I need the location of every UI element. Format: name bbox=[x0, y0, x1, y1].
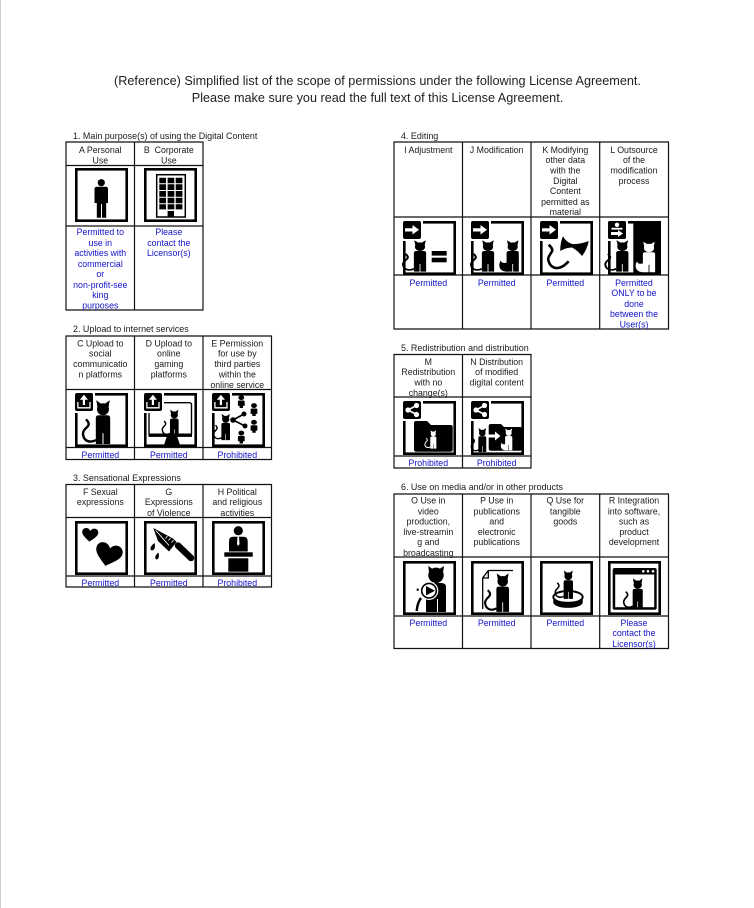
icon: modifying other data bbox=[540, 221, 592, 274]
column P label: and bbox=[489, 516, 504, 526]
column H label: activities bbox=[220, 508, 255, 518]
column D label: platforms bbox=[151, 370, 187, 380]
column H label: and religious bbox=[212, 497, 263, 507]
panel: 3. sensational expressions bbox=[66, 473, 272, 588]
column O label: live-streamin bbox=[403, 527, 453, 537]
column D label: D Upload to bbox=[146, 338, 192, 348]
status I: Permitted bbox=[409, 278, 447, 288]
column P label: electronic bbox=[478, 527, 516, 537]
icon: publications bbox=[472, 562, 523, 614]
status B: Licensor(s) bbox=[147, 248, 191, 258]
column O label: production, bbox=[407, 516, 450, 526]
column C label: social bbox=[89, 349, 112, 359]
column E label: third parties bbox=[214, 359, 261, 369]
icon: hearts bbox=[76, 522, 127, 574]
column O label: O Use in bbox=[411, 496, 446, 506]
status M: Prohibited bbox=[408, 458, 448, 468]
icon: use by third parties bbox=[212, 393, 264, 446]
column D label: gaming bbox=[154, 359, 183, 369]
column M label: M bbox=[425, 357, 432, 367]
icon: redistribution without change bbox=[403, 401, 455, 454]
column E label: within the bbox=[218, 370, 256, 380]
status R: Licensor(s) bbox=[612, 639, 656, 649]
icon: adjustment bbox=[403, 221, 455, 274]
heading: section 3: 3. Sensational Expressions bbox=[73, 473, 181, 483]
icon: software integration bbox=[609, 562, 660, 614]
icon: upload to social platforms bbox=[75, 393, 127, 446]
column R label: R Integration bbox=[609, 496, 659, 506]
column E label: for use by bbox=[218, 349, 257, 359]
column J label: J Modification bbox=[470, 145, 524, 155]
column N label: of modified bbox=[475, 367, 518, 377]
column K label: material bbox=[550, 207, 581, 217]
title: Please make sure you read the full text of this License Agreement. bbox=[192, 91, 563, 105]
status A: king bbox=[92, 290, 108, 300]
column G label: G bbox=[165, 487, 172, 497]
status E: Prohibited bbox=[217, 450, 257, 460]
icon: tangible goods bbox=[541, 562, 592, 614]
column N label: N Distribution bbox=[470, 357, 523, 367]
column R label: development bbox=[609, 537, 660, 547]
status A: purposes bbox=[82, 300, 119, 310]
status C: Permitted bbox=[81, 450, 119, 460]
column C label: n platforms bbox=[79, 370, 123, 380]
status A: activities with bbox=[74, 248, 126, 258]
table grid: section 6 bbox=[394, 494, 668, 648]
column K label: Content bbox=[550, 186, 581, 196]
column M label: change(s) bbox=[409, 388, 448, 398]
column A label: Use bbox=[92, 155, 108, 165]
column R label: into software, bbox=[608, 506, 660, 516]
table grid: section 1 bbox=[66, 142, 203, 310]
heading: section 2: 2. Upload to internet services bbox=[73, 324, 189, 334]
column K label: with the bbox=[549, 166, 581, 176]
column O label: g and bbox=[417, 537, 439, 547]
column O label: broadcasting bbox=[403, 548, 454, 558]
column Q label: tangible bbox=[550, 506, 581, 516]
status L: User(s) bbox=[620, 320, 648, 330]
column N label: digital content bbox=[470, 378, 524, 388]
column L label: of the bbox=[623, 155, 645, 165]
icon: corporate building bbox=[145, 169, 196, 221]
column O label: video bbox=[418, 506, 439, 516]
status A: or bbox=[96, 269, 104, 279]
table grid: section 3 bbox=[66, 484, 272, 587]
status H: Prohibited bbox=[217, 578, 257, 588]
status Q: Permitted bbox=[546, 618, 584, 628]
column M label: with no bbox=[413, 378, 442, 388]
column H label: H Political bbox=[218, 487, 257, 497]
status L: ONLY to be bbox=[611, 288, 657, 298]
status R: Please bbox=[621, 618, 648, 628]
column P label: P Use in bbox=[480, 496, 513, 506]
status A: non-profit-see bbox=[73, 280, 128, 290]
status A: use in bbox=[89, 238, 112, 248]
status F: Permitted bbox=[81, 578, 119, 588]
column R label: such as bbox=[619, 516, 650, 526]
table grid: section 5 bbox=[394, 354, 531, 468]
column G label: Expressions bbox=[145, 497, 193, 507]
column E label: online service bbox=[210, 380, 264, 390]
column R label: product bbox=[619, 527, 649, 537]
status P: Permitted bbox=[478, 618, 516, 628]
status B: Please bbox=[155, 227, 182, 237]
status A: commercial bbox=[78, 259, 123, 269]
column P label: publications bbox=[473, 506, 521, 516]
heading: section 4: 4. Editing bbox=[401, 131, 438, 141]
column B label: Use bbox=[161, 155, 177, 165]
page edge line bbox=[0, 0, 1, 908]
column P label: publications bbox=[473, 537, 521, 547]
column B label: B Corporate bbox=[144, 145, 194, 155]
column K label: Digital bbox=[553, 176, 578, 186]
status O: Permitted bbox=[409, 618, 447, 628]
status B: contact the bbox=[147, 238, 190, 248]
panel: 1. main purpose bbox=[66, 131, 258, 310]
column G label: of Violence bbox=[147, 508, 191, 518]
status L: done bbox=[624, 299, 644, 309]
icon: outsource modification bbox=[605, 221, 661, 274]
status G: Permitted bbox=[150, 578, 188, 588]
status J: Permitted bbox=[478, 278, 516, 288]
table grid: section 2 bbox=[66, 336, 272, 460]
icon: video production bbox=[404, 562, 455, 614]
column C label: C Upload to bbox=[77, 338, 124, 348]
column K label: permitted as bbox=[541, 197, 590, 207]
icon: modification bbox=[471, 221, 523, 274]
panel: 5. redistribution and distribution bbox=[394, 343, 531, 468]
status R: contact the bbox=[612, 628, 656, 638]
column A label: A Personal bbox=[79, 145, 122, 155]
panel: 2. upload to internet services bbox=[66, 324, 272, 460]
column K label: K Modifying bbox=[542, 145, 588, 155]
icon: speaker at podium bbox=[213, 522, 264, 574]
column D label: online bbox=[157, 349, 181, 359]
column K label: other data bbox=[545, 155, 585, 165]
column F label: expressions bbox=[77, 497, 124, 507]
icon: distribution of modified content bbox=[471, 401, 523, 454]
status A: Permitted to bbox=[77, 227, 124, 237]
status K: Permitted bbox=[546, 278, 584, 288]
title bbox=[114, 74, 641, 105]
column M label: Redistribution bbox=[401, 367, 455, 377]
panel: 6. use on media and products bbox=[394, 482, 668, 649]
status N: Prohibited bbox=[477, 458, 517, 468]
column I label: I Adjustment bbox=[404, 145, 453, 155]
icon: person bbox=[76, 169, 127, 221]
column Q label: goods bbox=[553, 516, 578, 526]
column E label: E Permission bbox=[211, 338, 263, 348]
heading: section 6: 6. Use on media and/or in other products bbox=[401, 482, 563, 492]
heading: section 5: 5. Redistribution and distribution bbox=[401, 343, 529, 353]
column C label: communicatio bbox=[73, 359, 128, 369]
icon: knife bbox=[145, 522, 196, 574]
status L: Permitted bbox=[615, 278, 653, 288]
status L: between the bbox=[610, 309, 658, 319]
heading: section 1: 1. Main purpose(s) of using the Digital Content bbox=[73, 131, 258, 141]
column Q label: Q Use for bbox=[546, 496, 584, 506]
column F label: F Sexual bbox=[83, 487, 118, 497]
title: (Reference) Simplified list of the scope of permissions under the following License Agreement. bbox=[114, 74, 641, 88]
icon: upload to gaming platforms bbox=[144, 393, 196, 446]
panel: 4. editing bbox=[394, 131, 668, 330]
table grid: section 4 bbox=[394, 142, 668, 329]
column L label: process bbox=[619, 176, 650, 186]
column L label: modification bbox=[611, 166, 658, 176]
status D: Permitted bbox=[150, 450, 188, 460]
column L label: L Outsource bbox=[610, 145, 658, 155]
